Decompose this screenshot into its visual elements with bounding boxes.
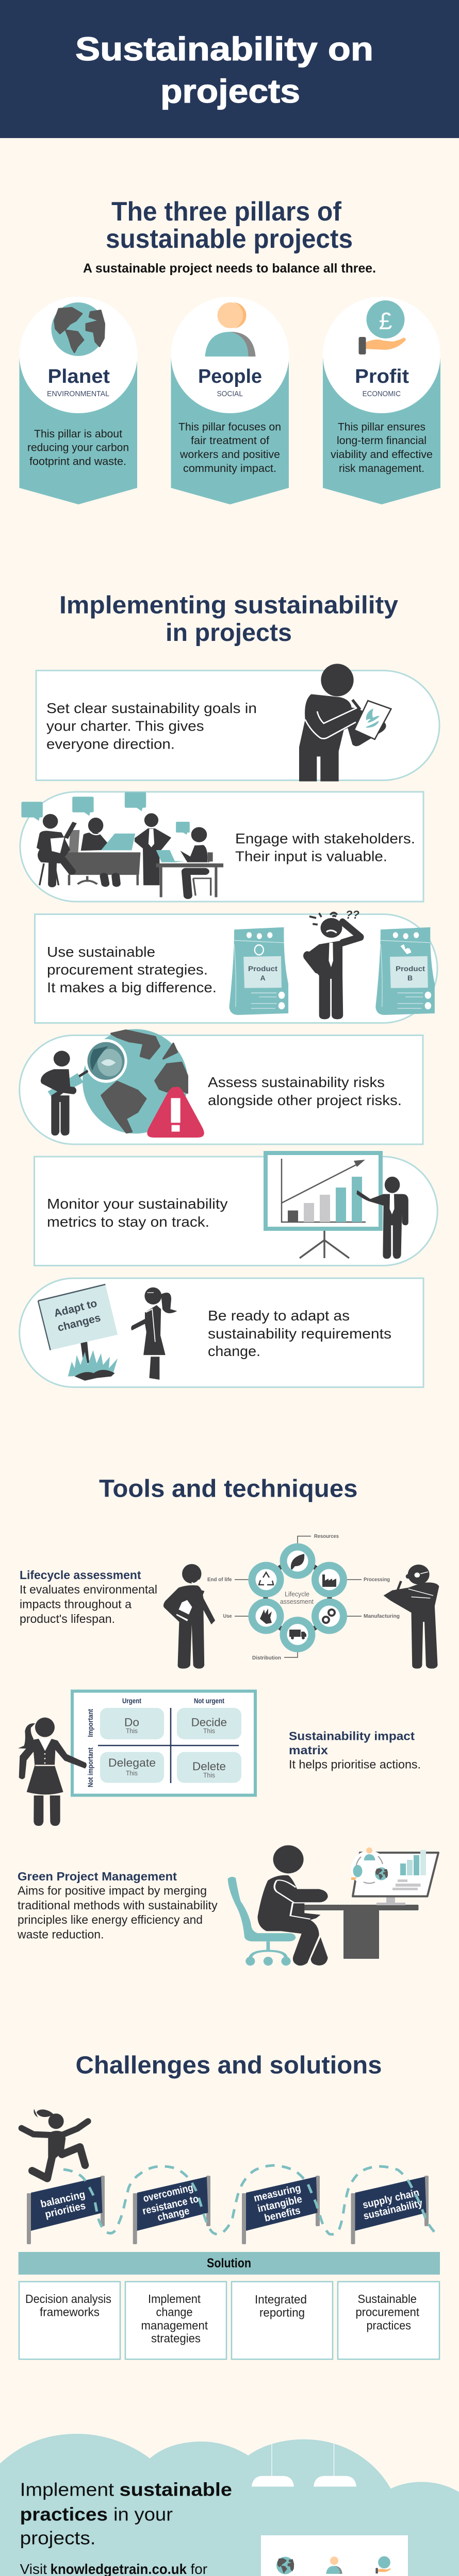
cell: delete: Delete: [192, 1760, 226, 1773]
node: end of life: [249, 1562, 284, 1597]
icon: person with clipboard: [163, 1564, 215, 1669]
hurdle: balancing priorities: priorities: [44, 2200, 87, 2221]
step text: procurement strategies.: [47, 962, 208, 978]
desk: [303, 1905, 419, 1959]
profit description: This pillar ensures: [338, 421, 425, 433]
node: distribution: [280, 1617, 316, 1652]
planet description: This pillar is about: [34, 428, 122, 440]
header banner: [0, 0, 459, 138]
icon: presenter: [356, 1177, 408, 1259]
text block: impact matrix: matrix: [289, 1743, 328, 1757]
panel: step 5 metrics: [34, 1153, 437, 1265]
cell: do: Do: [124, 1716, 139, 1729]
step text: [47, 944, 217, 995]
stage labels: [207, 1533, 400, 1661]
subheading: A sustainable project needs to balance all three.: [83, 261, 376, 276]
heading: challenges and solutions: Challenges and solutions: [75, 2052, 382, 2079]
solution box: sustainable procurement: [338, 2282, 439, 2359]
cell: delegate: This: [126, 1770, 138, 1777]
panel: step 2 stakeholders: [20, 792, 423, 902]
text block: impact matrix: Sustainability impact: [289, 1729, 415, 1742]
solution box: decision analysis: Decision analysis: [25, 2292, 111, 2306]
panel: step 3 procurement: [35, 908, 437, 1023]
text block: green project management: Aims for positive impact by merging: [18, 1884, 207, 1897]
icon: person with tablet: [299, 664, 391, 782]
text block: lifecycle assessment: It evaluates environmental: [20, 1583, 157, 1596]
hurdle: measuring intangible benefits: measuring: [253, 2182, 302, 2204]
people description: fair treatment of: [191, 435, 269, 447]
cell: do: This: [126, 1727, 138, 1735]
text block: impact matrix: [289, 1729, 421, 1771]
step text: Monitor your sustainability: [47, 1196, 228, 1212]
connector lines: [235, 1536, 362, 1657]
people description: [178, 421, 281, 474]
node: processing: [312, 1562, 347, 1597]
step text: It makes a big difference.: [47, 979, 217, 995]
cell: delete: This: [203, 1772, 215, 1779]
hurdle: supply chain sustainability: sustainability: [363, 2197, 424, 2222]
step text: sustainability requirements: [208, 1326, 391, 1342]
icon: person: [205, 302, 256, 357]
step text: [47, 1196, 228, 1230]
icon: confused person: ??: [346, 908, 359, 921]
solution box: change management: Implement: [148, 2292, 201, 2306]
cell: do: [100, 1708, 164, 1739]
solution box: integrated reporting: [232, 2282, 333, 2359]
text block: green project management: Green Project Management: [18, 1870, 177, 1883]
people description: community impact.: [183, 463, 276, 474]
solution bar: [19, 2252, 440, 2275]
hurdle: balancing priorities: [27, 2176, 105, 2244]
people description: This pillar focuses on: [178, 421, 281, 433]
title: projects: [160, 73, 300, 110]
planet description: reducing your carbon: [27, 442, 129, 454]
icon: globe with magnifier and warning: [41, 1029, 204, 1138]
lifecycle diagram: [207, 1533, 400, 1661]
icon: team meeting: [21, 792, 223, 897]
step text: Engage with stakeholders.: [235, 831, 415, 846]
people description: workers and positive: [179, 449, 280, 461]
hurdle: overcoming resistance to change: change: [156, 2205, 191, 2224]
solution box: change management: change: [156, 2305, 193, 2318]
dashed jump path: [63, 2165, 435, 2234]
icon: jumping woman: [22, 2109, 88, 2178]
call to action: [20, 2479, 243, 2576]
panel: people pillar: [171, 297, 289, 504]
icon: sign: Adapt to: [53, 1297, 99, 1319]
cell: decide: This: [203, 1727, 215, 1735]
centre label: assessment: [280, 1598, 314, 1605]
hurdle: measuring intangible benefits: benefits: [264, 2205, 302, 2224]
hurdle: overcoming resistance to change: resistance to: [141, 2193, 200, 2217]
panel: step 6 adapt: [20, 1278, 423, 1387]
step text: your charter. This gives: [46, 718, 204, 734]
profit label: Profit: [355, 366, 409, 387]
cell: delete: [177, 1752, 241, 1783]
solution bar: Solution: [207, 2256, 251, 2270]
solution box: decision analysis: frameworks: [40, 2305, 100, 2318]
text block: lifecycle assessment: [20, 1568, 157, 1625]
icon: product B bag: [375, 927, 435, 1015]
text block: lifecycle assessment: impacts throughout a: [20, 1597, 132, 1611]
icon: product B bag: Product: [396, 964, 425, 973]
chair: [228, 1877, 296, 1965]
icon: woman: [131, 1287, 177, 1380]
stage labels: End of life: [207, 1577, 232, 1583]
text block: impact matrix: It helps prioritise actions.: [289, 1758, 421, 1771]
panel: profit pillar: [323, 297, 440, 504]
cell: decide: [177, 1708, 241, 1739]
step text: [235, 831, 415, 864]
profit description: risk management.: [339, 463, 424, 474]
hurdle: overcoming resistance to change: [133, 2176, 210, 2244]
hurdle: measuring intangible benefits: intangible: [256, 2194, 303, 2215]
text block: green project management: [17, 1870, 218, 1941]
mini pillar: people: [315, 2554, 354, 2576]
hurdle: supply chain sustainability: [351, 2176, 429, 2244]
icon: sign: changes: [56, 1312, 102, 1334]
cell: decide: Decide: [191, 1716, 227, 1729]
step text: metrics to stay on track.: [47, 1214, 209, 1230]
profit description: viability and effective: [331, 449, 433, 461]
call to action: in your: [113, 2504, 173, 2525]
step text: Use sustainable: [47, 944, 155, 960]
heading: implementing: [59, 592, 398, 647]
solution box: integrated reporting: Integrated: [255, 2293, 307, 2306]
panel: step 1 goals: [36, 664, 439, 782]
text block: green project management: waste reduction.: [17, 1928, 104, 1941]
profit description: [331, 421, 433, 474]
step text: [208, 1308, 391, 1359]
call to action: sustainable: [120, 2479, 232, 2500]
step text: alongside other project risks.: [208, 1092, 402, 1108]
stage labels: Use: [223, 1613, 232, 1619]
call to action: projects.: [20, 2528, 96, 2549]
icon: product A bag: A: [260, 974, 266, 982]
planet sublabel: ENVIRONMENTAL: [47, 389, 109, 398]
solution box: integrated reporting: reporting: [259, 2306, 305, 2319]
matrix chart: [72, 1691, 255, 1795]
icon: product A bag: Product: [248, 964, 277, 973]
axis labels: Not important: [86, 1748, 94, 1787]
centre label: Lifecycle: [285, 1590, 309, 1598]
step text: Their input is valuable.: [235, 848, 387, 864]
hurdle: overcoming resistance to change: overcoming: [142, 2182, 194, 2205]
icon: confused person: [306, 908, 360, 1019]
solution box: sustainable procurement: practices: [366, 2318, 411, 2332]
step text: Assess sustainability risks: [208, 1074, 385, 1090]
icon: product B bag: B: [407, 974, 413, 982]
step text: everyone direction.: [46, 736, 175, 752]
title: Sustainability on: [75, 30, 373, 67]
axis labels: Urgent: [122, 1697, 141, 1705]
heading: implementing: in projects: [166, 619, 292, 647]
call to action: practices: [20, 2504, 108, 2525]
stage labels: Manufacturing: [364, 1613, 400, 1619]
icon: person at desk with monitor: [228, 1845, 438, 1965]
profit sublabel: ECONOMIC: [363, 389, 401, 398]
hurdle: measuring intangible benefits: [242, 2176, 320, 2244]
chart on presentation board: [266, 1153, 381, 1258]
icon: pound in hand: £: [379, 308, 392, 334]
stage labels: Resources: [314, 1533, 339, 1539]
icon: pound in hand: [359, 300, 406, 354]
heading: implementing: Implementing sustainability: [59, 592, 398, 619]
solution box: decision analysis: [19, 2282, 120, 2359]
solution box: change management: strategies: [151, 2331, 201, 2345]
panel: step 4 risks: [20, 1029, 423, 1144]
ceiling lamps: [252, 2444, 356, 2486]
heading: tools and techniques: Tools and techniques: [99, 1476, 358, 1503]
icon: person with glasses writing: [384, 1565, 439, 1669]
heading: the three pillars: [106, 197, 353, 254]
hurdle: balancing priorities: balancing: [40, 2189, 86, 2210]
panel: planet pillar: [20, 297, 137, 504]
mini pillar: profit: [364, 2554, 402, 2576]
cell: delegate: Delegate: [108, 1756, 156, 1769]
icon: globe: [52, 302, 105, 356]
solution box: sustainable procurement: Sustainable: [358, 2292, 417, 2306]
step text: [208, 1074, 402, 1108]
text block: green project management: traditional methods with sustainability: [18, 1899, 218, 1912]
planet description: footprint and waste.: [29, 455, 126, 467]
solution box: change management: management: [141, 2318, 208, 2332]
planet label: Planet: [47, 366, 110, 387]
seated person: [257, 1845, 328, 1965]
solution box: sustainable procurement: procurement: [356, 2305, 420, 2318]
axis labels: Important: [86, 1709, 94, 1737]
mini pillar: planet: [266, 2554, 305, 2576]
presentation board: [261, 2535, 408, 2576]
axis labels: [86, 1697, 224, 1787]
icon: product A bag: [229, 927, 288, 1015]
node: manufacturing: [312, 1598, 347, 1634]
heading: the three pillars: sustainable projects: [106, 224, 353, 254]
stage labels: Distribution: [252, 1655, 281, 1661]
text block: lifecycle assessment: Lifecycle assessment: [20, 1568, 141, 1582]
title: [75, 30, 373, 110]
step text: Set clear sustainability goals in: [46, 700, 257, 716]
step text: [46, 700, 257, 752]
footer scene background: [0, 2434, 459, 2576]
icon: sign: [38, 1284, 118, 1381]
stage labels: Processing: [364, 1577, 390, 1583]
node: use: [249, 1598, 284, 1634]
cell: delegate: [100, 1752, 164, 1783]
profit description: long-term financial: [337, 435, 427, 447]
text block: green project management: principles like energy efficiency and: [18, 1913, 203, 1926]
heading: the three pillars: The three pillars of: [111, 197, 342, 227]
people sublabel: SOCIAL: [217, 389, 243, 398]
solution box: change management: [125, 2282, 226, 2359]
centre label: [280, 1590, 314, 1605]
node: resources: [280, 1544, 316, 1579]
people label: People: [198, 366, 262, 387]
hurdle: supply chain sustainability: supply chain: [362, 2187, 420, 2211]
monitor: [351, 1848, 438, 1905]
planet description: [27, 428, 129, 467]
icon: woman presenting matrix: [18, 1718, 87, 1826]
call to action: Implement: [20, 2479, 114, 2500]
step text: Be ready to adapt as: [208, 1308, 350, 1324]
step text: change.: [208, 1343, 260, 1359]
axis labels: Not urgent: [194, 1697, 224, 1705]
text block: lifecycle assessment: product's lifespan.: [20, 1612, 115, 1625]
